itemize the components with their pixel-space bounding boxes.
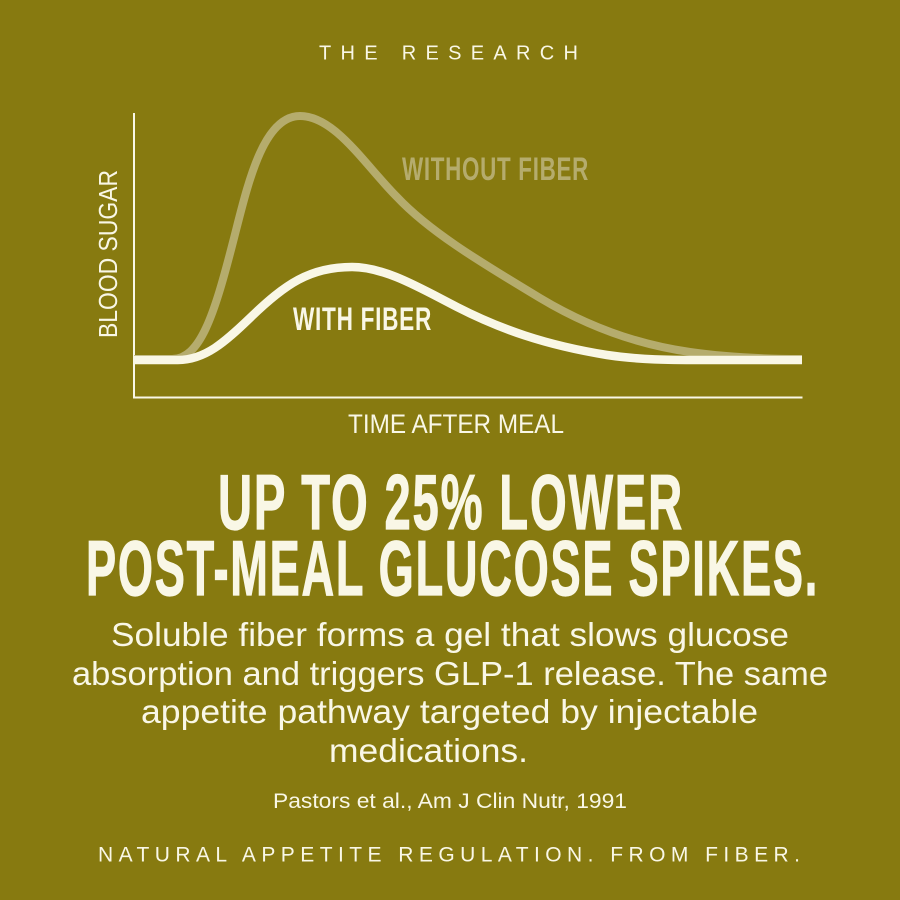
label: with fiber: WITH FIBER (293, 301, 432, 337)
citation: Pastors et al., Am J Clin Nutr, 1991 (273, 790, 627, 813)
body paragraph (72, 617, 828, 770)
body line 1: Soluble fiber forms a gel that slows glucose (111, 617, 789, 654)
body line 3: appetite pathway targeted by injectable (141, 694, 758, 731)
body line 2: absorption and triggers GLP-1 release. The same (72, 656, 828, 693)
x axis label: TIME AFTER MEAL (348, 409, 564, 439)
eyebrow heading: THE RESEARCH (319, 42, 578, 64)
tagline: NATURAL APPETITE REGULATION. FROM FIBER. (98, 844, 800, 866)
label: without fiber: WITHOUT FIBER (402, 151, 589, 187)
axes (134, 113, 802, 398)
curve: without fiber (134, 116, 802, 359)
chart: blood sugar over time (93, 113, 802, 439)
headline (86, 458, 819, 612)
curve: with fiber (134, 267, 802, 360)
y axis label: BLOOD SUGAR (93, 170, 123, 338)
body line 4: medications. (329, 733, 528, 770)
